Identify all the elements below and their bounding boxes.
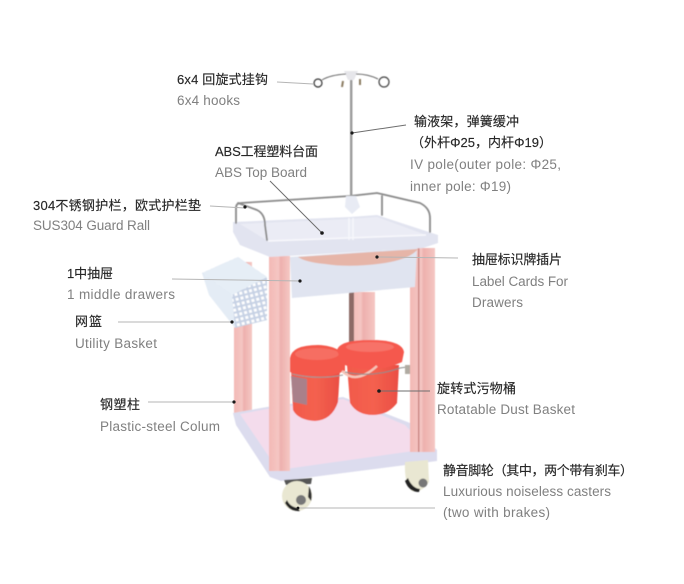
label: IV pole: 输液架，弹簧缓冲	[414, 114, 519, 129]
label: utility basket: 网篮	[75, 314, 102, 329]
label: middle drawer	[67, 266, 175, 302]
label: drawer label cards: Drawers	[472, 295, 523, 310]
label: hooks: 6x4 回旋式挂钩	[177, 72, 268, 87]
bottom shelf	[233, 397, 437, 481]
label: drawer label cards: 抽屉标识牌插片	[472, 252, 562, 267]
label: casters	[443, 463, 633, 520]
trolley illustration	[202, 71, 438, 511]
label: plastic-steel column: 钢塑柱	[100, 397, 140, 412]
label: drawer label cards	[472, 252, 568, 310]
label: hooks	[177, 72, 268, 108]
label: IV pole: IV pole(outer pole: Φ25,	[410, 157, 561, 172]
label: plastic-steel column: Plastic-steel Colum	[100, 419, 220, 434]
label: guard rail: 304不锈钢护栏，欧式护栏垫	[33, 198, 201, 213]
back legs	[234, 262, 375, 415]
left bucket	[290, 345, 345, 421]
label: guard rail	[33, 198, 201, 233]
drawer	[290, 248, 418, 298]
label: top board: ABS工程塑料台面	[215, 144, 318, 159]
top board	[233, 215, 438, 257]
front right caster	[405, 460, 429, 492]
label: dust basket: 旋转式污物桶	[437, 381, 516, 396]
label: middle drawer: 1中抽屉	[67, 266, 113, 281]
label: plastic-steel column	[100, 397, 220, 434]
label: middle drawer: 1 middle drawers	[67, 287, 175, 302]
label: IV pole	[410, 114, 561, 194]
label: hooks: 6x4 hooks	[177, 93, 240, 108]
label: drawer label cards: Label Cards For	[472, 274, 568, 289]
guard rail	[236, 193, 430, 240]
label: casters: Luxurious noiseless casters	[443, 484, 611, 499]
leader lines	[118, 82, 458, 509]
utility basket	[202, 257, 267, 328]
label: IV pole: inner pole: Φ19)	[410, 179, 511, 194]
label: casters: 静音脚轮（其中，两个带有刹车）	[443, 463, 633, 478]
label: casters: (two with brakes)	[443, 505, 550, 520]
front left caster	[282, 478, 312, 511]
right bucket	[337, 340, 415, 415]
label: guard rail: SUS304 Guard Rall	[33, 218, 150, 233]
label: IV pole: （外杆Φ25，内杆Φ19）	[411, 135, 552, 150]
label: utility basket	[75, 314, 157, 351]
label: utility basket: Utility Basket	[75, 336, 157, 351]
label: top board	[215, 144, 318, 180]
IV pole with hooks	[314, 71, 389, 214]
label: top board: ABS Top Board	[215, 165, 307, 180]
label: dust basket	[437, 381, 575, 417]
label: dust basket: Rotatable Dust Basket	[437, 402, 575, 417]
front legs	[269, 248, 435, 471]
drawer label card	[298, 249, 418, 266]
